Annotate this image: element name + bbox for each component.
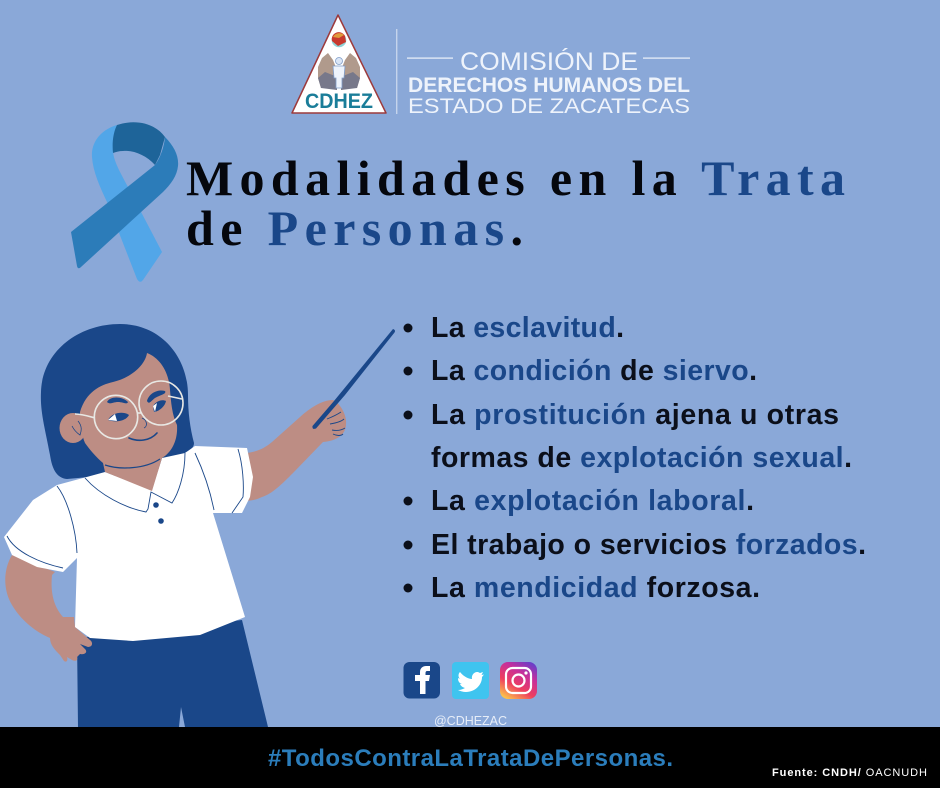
- icon: globe: [332, 32, 346, 47]
- bullet 1: La esclavitud.: [431, 312, 624, 344]
- bullet 3: [404, 399, 852, 474]
- title line 2: de Personas.: [186, 200, 523, 256]
- bullet list: [404, 312, 866, 604]
- bullet 4: La explotación laboral.: [431, 485, 754, 517]
- bullet 5: El trabajo o servicios forzados.: [431, 529, 866, 561]
- title: [186, 150, 845, 256]
- icon: blue awareness ribbon: [71, 122, 178, 282]
- pants: [77, 620, 268, 727]
- icon: twitter: [452, 662, 489, 699]
- organization name: DERECHOS HUMANOS DEL: [408, 73, 690, 97]
- icon: hands and person: [318, 53, 360, 90]
- eyes and brows: [107, 390, 166, 421]
- bullet 2: La condición de siervo.: [431, 355, 757, 387]
- face and neck: [80, 353, 177, 491]
- left arm and hand: [5, 555, 92, 662]
- social handle: @CDHEZAC: [434, 714, 507, 728]
- source credit: Fuente: CNDH/ OACNUDH: [772, 767, 927, 779]
- icon: facebook: [404, 662, 440, 698]
- logo wordmark: CDHEZ: CDHEZ: [305, 90, 373, 113]
- icon: instagram: [500, 662, 537, 699]
- organization name: [407, 47, 690, 118]
- nose and smile: [105, 418, 160, 468]
- organization name: ESTADO DE ZACATECAS: [408, 94, 690, 118]
- hair: [41, 324, 194, 479]
- shirt details: collar, seams and buttons: [7, 449, 243, 568]
- footer bar: [0, 727, 940, 788]
- right arm and hand: [244, 400, 346, 501]
- glasses: [75, 381, 183, 439]
- ear: [60, 413, 86, 443]
- illustration: teacher girl with pointer: [4, 324, 395, 727]
- bullet 3: La prostitución ajena u otras: [431, 399, 839, 431]
- hashtag: #TodosContraLaTrataDePersonas.: [268, 745, 673, 772]
- social icons: [404, 662, 537, 699]
- logo: CDHEZ triangle: [292, 15, 386, 113]
- pointer stick: [312, 329, 395, 429]
- organization name: COMISIÓN DE: [460, 47, 638, 76]
- logo divider: [396, 29, 397, 114]
- title line 1: Modalidades en la Trata: [186, 150, 845, 206]
- bullet 3: formas de explotación sexual.: [431, 442, 852, 474]
- bullet 6: La mendicidad forzosa.: [431, 572, 760, 604]
- shirt: [4, 446, 253, 641]
